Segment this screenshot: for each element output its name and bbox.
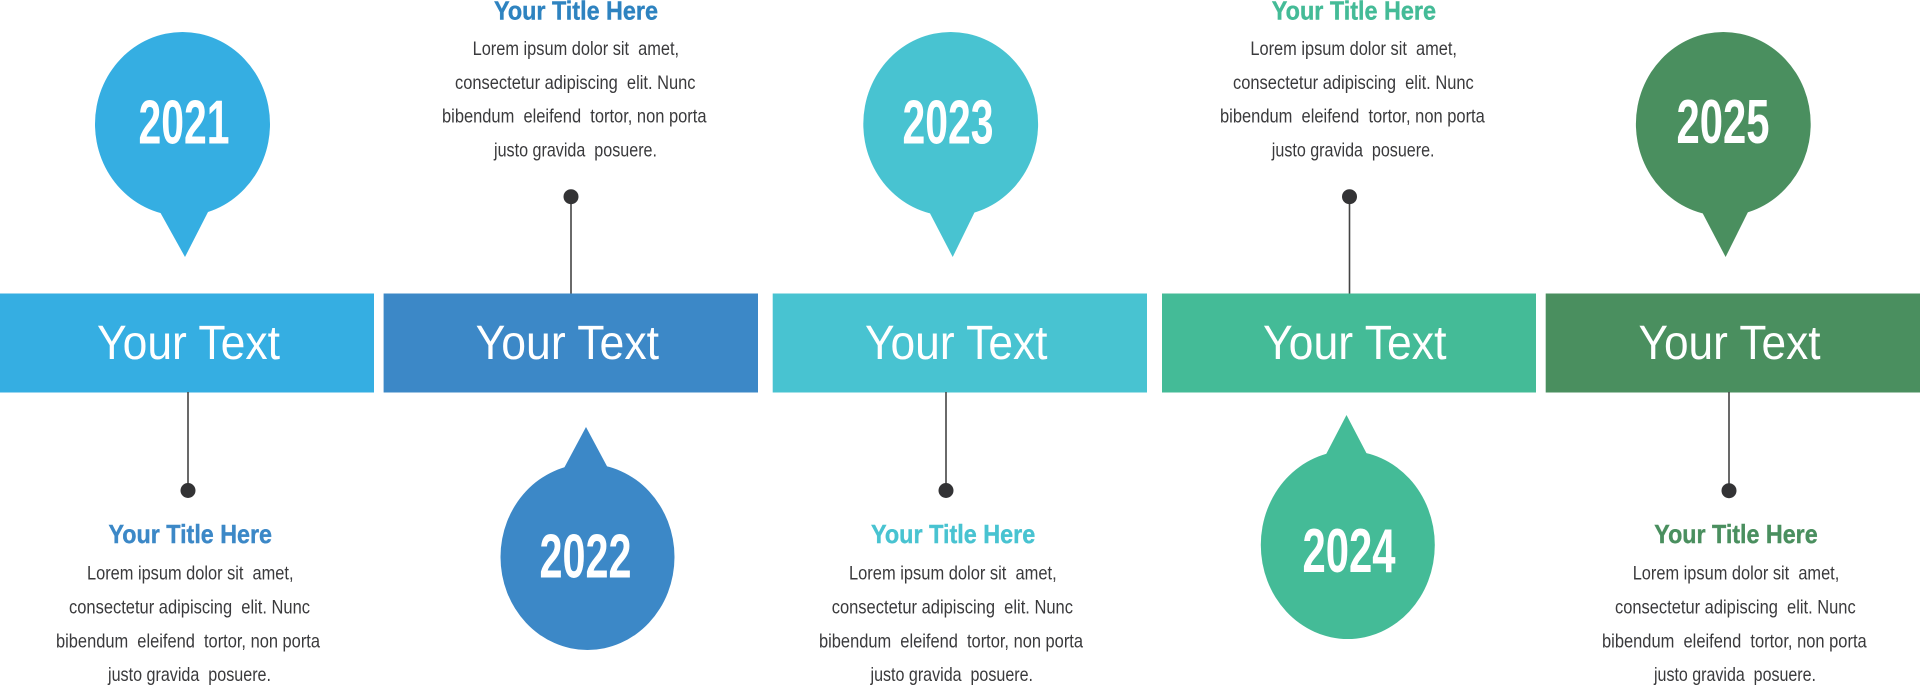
bar: 2024 label: Your Text [1263,317,1446,370]
text block: 2022 [442,0,707,162]
text block: 2022: consectetur adipiscing elit. Nunc [455,72,696,94]
pin: 2023 [863,32,1038,257]
column: 2023 [773,32,1147,685]
text block: 2021: Your Title Here [108,519,272,549]
text block: 2024: Lorem ipsum dolor sit amet, [1250,38,1457,60]
text block: 2025: bibendum eleifend tortor, non porta [1602,630,1867,652]
text block: 2025: Lorem ipsum dolor sit amet, [1633,562,1839,584]
text block: 2022: Lorem ipsum dolor sit amet, [473,38,679,60]
text block: 2024: consectetur adipiscing elit. Nunc [1233,72,1474,94]
column: 2021 [0,32,374,685]
bar: 2025 label: Your Text [1638,317,1820,370]
text block: 2024: justo gravida posuere. [1271,140,1434,162]
text block: 2023: Your Title Here [871,519,1035,549]
text block: 2023: consectetur adipiscing elit. Nunc [832,596,1073,618]
bar: 2022 label [384,294,758,392]
text block: 2024: bibendum eleifend tortor, non porta [1220,106,1485,128]
pin: 2021 [95,32,270,257]
text block: 2021 [56,519,320,685]
bar: 2023 label [773,294,1147,392]
bar: 2021 label [0,294,374,392]
connector: 2023 [938,392,954,498]
connector: 2021 [180,392,196,498]
pin: 2025: 2025 [1676,88,1770,157]
text block: 2023: Lorem ipsum dolor sit amet, [849,562,1057,584]
bar: 2022 label: Your Text [476,317,659,370]
text block: 2023: bibendum eleifend tortor, non porta [819,630,1083,652]
text block: 2024 [1220,0,1485,162]
pin: 2021: 2021 [138,88,230,158]
column: 2022 [384,0,758,650]
bar: 2023 label: Your Text [865,317,1048,370]
pin: 2022: 2022 [540,522,632,592]
bar: 2021 label: Your Text [97,317,280,370]
text block: 2025: consectetur adipiscing elit. Nunc [1615,596,1856,618]
pin: 2022 [500,427,674,650]
text block: 2022: justo gravida posuere. [493,140,657,162]
connector: 2025 [1722,392,1736,498]
pin: 2024: 2024 [1302,517,1396,586]
pin: 2024 [1261,415,1435,639]
bar: 2024 label [1162,294,1536,392]
connector: 2024 [1342,189,1357,294]
text block: 2025: Your Title Here [1654,519,1818,549]
column: 2025 [1546,32,1920,685]
bar: 2025 label [1546,294,1920,392]
text block: 2021: bibendum eleifend tortor, non porta [56,630,320,652]
connector: 2022 [564,189,578,294]
text block: 2021: Lorem ipsum dolor sit amet, [87,562,294,584]
pin: 2023: 2023 [902,88,994,158]
text block: 2025 [1602,519,1867,685]
text block: 2021: consectetur adipiscing elit. Nunc [69,596,310,618]
text block: 2023 [819,519,1083,685]
pin: 2025 [1636,32,1811,257]
column: 2024 [1162,0,1536,639]
text block: 2022: bibendum eleifend tortor, non porta [442,106,707,128]
